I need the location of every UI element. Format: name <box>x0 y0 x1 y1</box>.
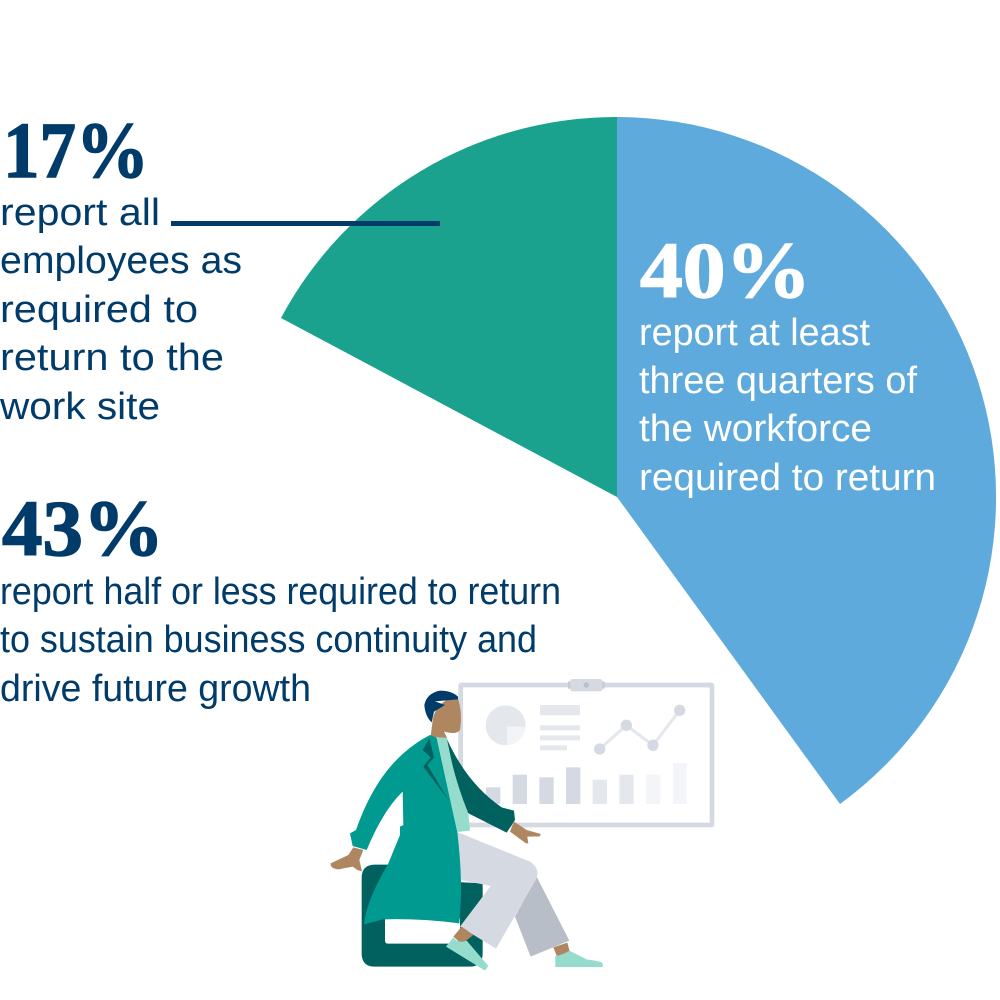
front foot <box>453 927 473 944</box>
shirt <box>437 738 470 832</box>
text lines <box>540 705 580 715</box>
text block: 40%: 40% <box>640 228 811 315</box>
text block: 40%: required to return <box>639 457 936 499</box>
back leg <box>515 877 569 957</box>
leader line <box>171 221 440 226</box>
bars <box>486 787 500 804</box>
text block: 43%: to sustain business continuity and <box>0 619 537 661</box>
text block: 17%: required to <box>0 289 198 331</box>
text block: 43%: 43% <box>2 486 164 573</box>
hair <box>424 691 458 722</box>
text block: 17%: 17% <box>3 108 149 195</box>
text block: 40%: the workforce <box>639 408 872 450</box>
illustration: person seated before dashboard <box>331 679 712 971</box>
neck and face <box>431 698 461 738</box>
dashboard board <box>461 679 712 825</box>
pie slice: 17% green <box>281 117 617 497</box>
line chart <box>600 710 680 749</box>
text block: 43%: drive future growth <box>0 668 311 710</box>
text block: 17%: work site <box>0 386 160 428</box>
text block: 17%: report all <box>0 192 160 234</box>
text block: 17%: return to the <box>0 337 224 379</box>
text block: 43%: report half or less required to return <box>0 571 561 613</box>
stool <box>362 865 483 967</box>
back foot <box>553 943 571 957</box>
back sleeve <box>447 738 515 833</box>
lapel <box>423 738 448 800</box>
front leg <box>457 832 537 949</box>
pie slice: 40% blue <box>617 117 996 804</box>
coat <box>350 735 461 924</box>
text block: 43% <box>0 486 561 710</box>
mini pie <box>486 705 526 745</box>
text block: 17%: employees as <box>0 240 242 282</box>
text block: 40%: report at least <box>639 312 870 354</box>
text block: 17% <box>0 108 242 428</box>
hand near board <box>510 822 541 843</box>
text block: 40%: three quarters of <box>639 360 917 402</box>
text block: 40% <box>639 228 936 499</box>
hand on stool <box>331 847 363 871</box>
